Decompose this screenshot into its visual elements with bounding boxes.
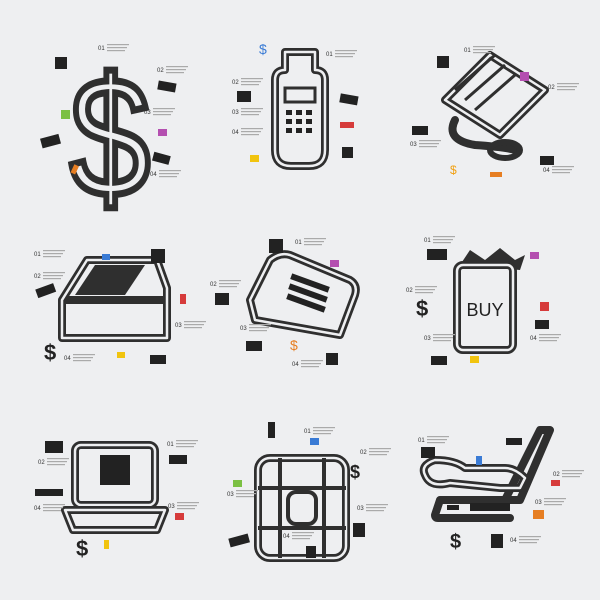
- icon: chip main: [258, 458, 346, 558]
- panel: BUY: [406, 236, 561, 365]
- labels money: 03: [410, 142, 417, 148]
- icon: laptop main: [65, 445, 165, 530]
- labels laptop: [34, 440, 199, 512]
- labels counter: 03: [175, 323, 182, 329]
- labels chip: 04: [283, 534, 290, 540]
- panel: card terminal: [210, 238, 356, 368]
- labels card terminal: 04: [292, 362, 299, 368]
- small icons counter: [35, 249, 186, 365]
- icon: terminal main: [275, 52, 325, 166]
- small icons chip: [228, 422, 365, 558]
- labels laptop hands: 02: [553, 472, 560, 478]
- labels laptop: 01: [167, 442, 174, 448]
- icon: BUY main: [457, 248, 525, 350]
- labels BUY: [406, 236, 561, 342]
- labels counter: 04: [64, 356, 71, 362]
- small icons money: $: [450, 163, 457, 177]
- panel: dollar sign: [40, 43, 188, 233]
- labels BUY: 01: [424, 238, 431, 244]
- labels money: 01: [464, 48, 471, 54]
- labels counter: 01: [34, 252, 41, 258]
- labels laptop: 03: [168, 504, 175, 510]
- small icons BUY: $: [416, 296, 428, 321]
- labels chip: 03: [357, 506, 364, 512]
- labels counter: [34, 250, 206, 362]
- small icons laptop: [35, 441, 187, 561]
- small icons chip: $: [350, 462, 360, 482]
- small icons counter: $: [44, 340, 56, 365]
- labels dollar: 03: [144, 110, 151, 116]
- labels card terminal: 01: [295, 240, 302, 246]
- labels money: 04: [543, 168, 550, 174]
- labels dollar: 01: [98, 46, 105, 52]
- labels counter: 02: [34, 274, 41, 280]
- labels dollar: 02: [157, 68, 164, 74]
- labels dollar: 04: [150, 172, 157, 178]
- labels card terminal: 03: [240, 326, 247, 332]
- small icons laptop: $: [76, 536, 88, 561]
- small icons money: [412, 56, 554, 177]
- icon: money main: [445, 55, 545, 158]
- labels BUY: 04: [530, 336, 537, 342]
- labels terminal: [232, 50, 357, 136]
- icon: card terminal main: [250, 254, 356, 335]
- small icons laptop hands: $: [450, 531, 461, 553]
- labels card terminal: [210, 238, 326, 368]
- labels chip: 02: [360, 450, 367, 456]
- icon: laptop hands main: [424, 430, 550, 518]
- small icons dollar: [40, 57, 177, 174]
- labels chip: [227, 427, 391, 540]
- small icons card terminal: $: [290, 337, 298, 353]
- small icons card terminal: [215, 239, 339, 365]
- labels chip: 01: [304, 429, 311, 435]
- icon: dollar main: $: [70, 43, 150, 233]
- labels terminal: 01: [326, 52, 333, 58]
- labels terminal: 04: [232, 130, 239, 136]
- labels laptop: 04: [34, 506, 41, 512]
- panel: money counter: [34, 249, 206, 365]
- panel: POS terminal: [232, 41, 359, 166]
- panel: laptop: [34, 440, 199, 561]
- labels terminal: 03: [232, 110, 239, 116]
- labels laptop hands: 03: [535, 500, 542, 506]
- small icons laptop hands: [421, 438, 560, 553]
- labels chip: 03: [227, 492, 234, 498]
- labels card terminal: 02: [210, 282, 217, 288]
- labels BUY: 02: [406, 288, 413, 294]
- labels money: [410, 46, 579, 174]
- labels terminal: 02: [232, 80, 239, 86]
- labels laptop hands: [418, 436, 584, 544]
- labels BUY: 03: [424, 336, 431, 342]
- small icons terminal: $: [259, 41, 267, 57]
- panel: chip: [227, 422, 391, 558]
- panel: money stack: [410, 46, 579, 177]
- labels laptop: 02: [38, 460, 45, 466]
- icon: BUY main: BUY: [466, 300, 504, 320]
- icon: counter main: [62, 260, 167, 338]
- labels laptop hands: 01: [418, 438, 425, 444]
- small icons BUY: [416, 249, 549, 365]
- labels money: 02: [548, 85, 555, 91]
- labels laptop hands: 04: [510, 538, 517, 544]
- panel: laptop with hands: [418, 430, 584, 553]
- labels dollar: [98, 44, 188, 178]
